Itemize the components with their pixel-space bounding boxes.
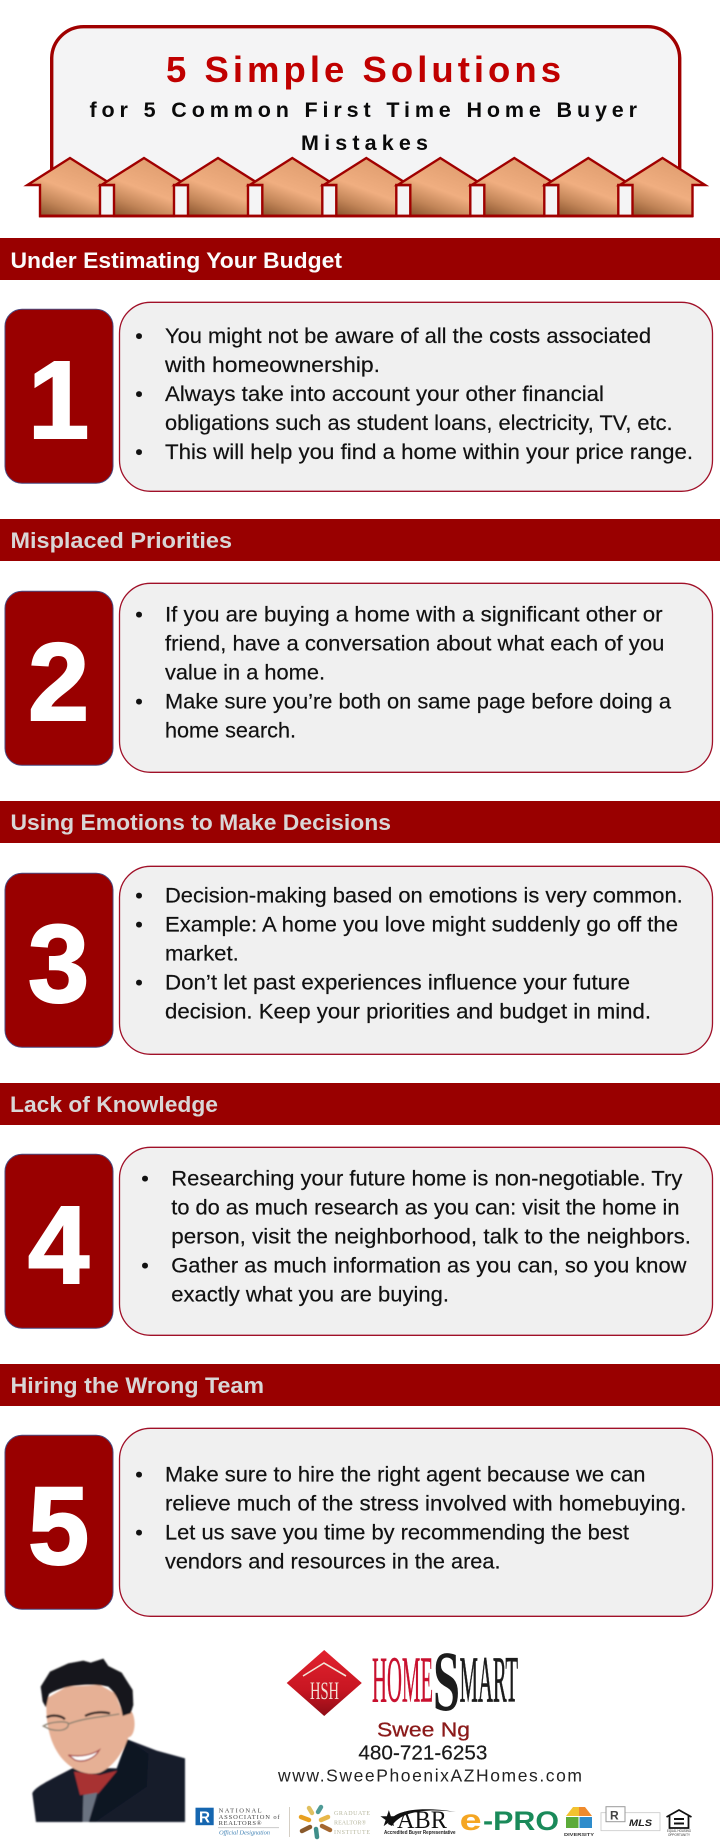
number box 5: 5 — [28, 1465, 89, 1588]
wordmark: HOME — [372, 1644, 433, 1717]
number box 2: 2 — [28, 621, 89, 744]
section 5: hiring the wrong team — [0, 1364, 720, 1616]
number box 4 — [5, 1154, 113, 1328]
heading band 3: Using Emotions to Make Decisions — [10, 810, 391, 835]
badge: MLS: R — [610, 1808, 619, 1822]
badge: Graduate Realtor Institute: INSTITUTE — [334, 1830, 370, 1836]
heading band 5: Hiring the Wrong Team — [10, 1373, 264, 1398]
number box 3 — [5, 873, 113, 1047]
text panel 3: • — [135, 913, 143, 937]
text panel 5: vendors and resources in the area. — [165, 1550, 500, 1574]
text panel 1: This will help you find a home within your price range. — [165, 440, 693, 464]
text panel 1: Always take into account your other financial — [165, 382, 604, 406]
title panel with row of houses — [27, 27, 705, 217]
badge: ABR: ★ — [379, 1806, 399, 1831]
row of nine houses — [27, 158, 705, 217]
badge: Graduate Realtor Institute — [301, 1807, 370, 1837]
badge: Graduate Realtor Institute: REALTOR® — [334, 1820, 366, 1827]
badge: at home with diversity — [564, 1807, 594, 1837]
text panel 3: Don’t let past experiences influence your future — [165, 971, 630, 995]
text panel 1: • — [135, 440, 143, 464]
text panel 2: If you are buying a home with a significant other or — [165, 603, 662, 627]
text panel 3: decision. Keep your priorities and budget in mind. — [165, 1000, 651, 1024]
text panel 5: Let us save you time by recommending the best — [165, 1521, 629, 1545]
text panel 2: Make sure you’re both on same page before doing a — [165, 690, 671, 714]
text panel 1: You might not be aware of all the costs associated — [165, 324, 651, 348]
text panel 2: friend, have a conversation about what each of you — [165, 632, 664, 656]
text panel 4 — [120, 1147, 712, 1335]
text panel 4: • — [141, 1167, 149, 1191]
text panel 5: Make sure to hire the right agent because we can — [165, 1463, 646, 1487]
icon: red diamond: HSH — [310, 1678, 339, 1705]
text panel 3: • — [135, 884, 143, 908]
text panel 1: obligations such as student loans, electricity, TV, etc. — [165, 411, 673, 435]
subtitle line 2: Mistakes — [301, 131, 428, 155]
section 4: lack of knowledge — [0, 1083, 720, 1335]
text panel 5: • — [135, 1463, 143, 1487]
section 2: misplaced priorities — [0, 519, 720, 772]
badge: National Association of Realtors: REALTORS® — [219, 1820, 262, 1827]
text panel 4: • — [141, 1254, 149, 1278]
text panel 2: home search. — [165, 719, 296, 743]
badge: National Association of Realtors: ASSOCIATION of — [219, 1814, 280, 1821]
text panel 4: Researching your future home is non-negotiable. Try — [171, 1167, 683, 1191]
text panel 2 — [120, 583, 712, 772]
wordmark — [372, 1633, 518, 1729]
title panel — [52, 27, 680, 217]
text panel 3: Example: A home you love might suddenly go off the — [165, 913, 678, 937]
badge: MLS: MLS — [629, 1818, 652, 1828]
contact: website: www.SweePhoenixAZHomes.com — [277, 1766, 582, 1786]
text panel 2: • — [135, 603, 143, 627]
badge: equal housing opportunity: OPPORTUNITY — [668, 1833, 691, 1837]
heading band 4 — [0, 1083, 720, 1125]
heading band 1: Under Estimating Your Budget — [10, 248, 343, 273]
title: 5 Simple Solutions — [166, 49, 561, 90]
text panel 1: • — [135, 382, 143, 406]
text panel 1 — [120, 302, 712, 491]
badge: e-PRO: -PRO — [483, 1806, 559, 1836]
text panel 5 — [120, 1428, 712, 1616]
heading band 4: Lack of Knowledge — [10, 1092, 218, 1117]
section 3: using emotions to make decisions — [0, 801, 720, 1054]
number box 1: 1 — [28, 339, 89, 462]
text panel 3: Decision-making based on emotions is very common. — [165, 884, 683, 908]
number box 4: 4 — [28, 1184, 89, 1307]
text panel 2: value in a home. — [165, 661, 325, 685]
badge: MLS — [601, 1807, 660, 1831]
text panel 1: with homeownership. — [164, 353, 380, 377]
section 1: under estimating your budget — [0, 238, 720, 491]
badge: Graduate Realtor Institute: GRADUATE — [334, 1811, 370, 1817]
badge: National Association of Realtors: NATIONAL — [219, 1808, 262, 1815]
icon: red diamond — [287, 1650, 362, 1716]
text: MART — [460, 1644, 518, 1717]
agent portrait — [32, 1659, 185, 1822]
text panel 1: • — [135, 324, 143, 348]
heading band 3 — [0, 801, 720, 843]
text panel 3 — [120, 866, 712, 1054]
logo: HomeSmart — [287, 1633, 518, 1729]
badge: e-PRO: e — [460, 1804, 482, 1837]
text panel 5: • — [135, 1521, 143, 1545]
designation badges — [196, 1804, 692, 1837]
subtitle line 1: for 5 Common First Time Home Buyer — [90, 98, 638, 122]
contact: phone: 480-721-6253 — [358, 1742, 487, 1764]
text panel 3: • — [135, 971, 143, 995]
badge: ABR: Accredited Buyer Representative — [384, 1830, 456, 1836]
text panel 4: Gather as much information as you can, so you know — [171, 1254, 687, 1278]
badge: ABR: ABR — [397, 1807, 447, 1834]
heading band 2: Misplaced Priorities — [10, 528, 232, 553]
badge: National Association of Realtors: R — [199, 1810, 210, 1826]
text panel 4: person, visit the neighborhood, talk to the neighbors. — [171, 1225, 691, 1249]
badge: equal housing opportunity — [666, 1810, 692, 1837]
text panel 2: • — [135, 690, 143, 714]
badge: at home with diversity: DIVERSITY — [564, 1832, 594, 1837]
number box 2 — [5, 591, 113, 765]
heading band 1 — [0, 238, 720, 280]
heading band 5 — [0, 1364, 720, 1406]
contact: name: Swee Ng — [377, 1719, 470, 1742]
number box 5 — [5, 1435, 113, 1609]
text panel 5: relieve much of the stress involved with homebuying. — [165, 1492, 686, 1516]
badge: National Association of Realtors: Official Designation — [219, 1830, 270, 1836]
text panel 3: market. — [165, 942, 239, 966]
text panel 4: to do as much research as you can: visit the home in — [171, 1196, 680, 1220]
number box 3: 3 — [28, 903, 89, 1026]
badge: e-PRO — [460, 1804, 559, 1837]
wordmark: S — [433, 1633, 460, 1729]
badge: ABR — [379, 1806, 456, 1836]
text panel 4: exactly what you are buying. — [171, 1283, 449, 1307]
heading band 2 — [0, 519, 720, 561]
badge: equal housing opportunity: EQUAL HOUSING — [667, 1829, 691, 1833]
number box 1 — [5, 309, 113, 483]
badge: National Association of Realtors — [196, 1807, 290, 1837]
